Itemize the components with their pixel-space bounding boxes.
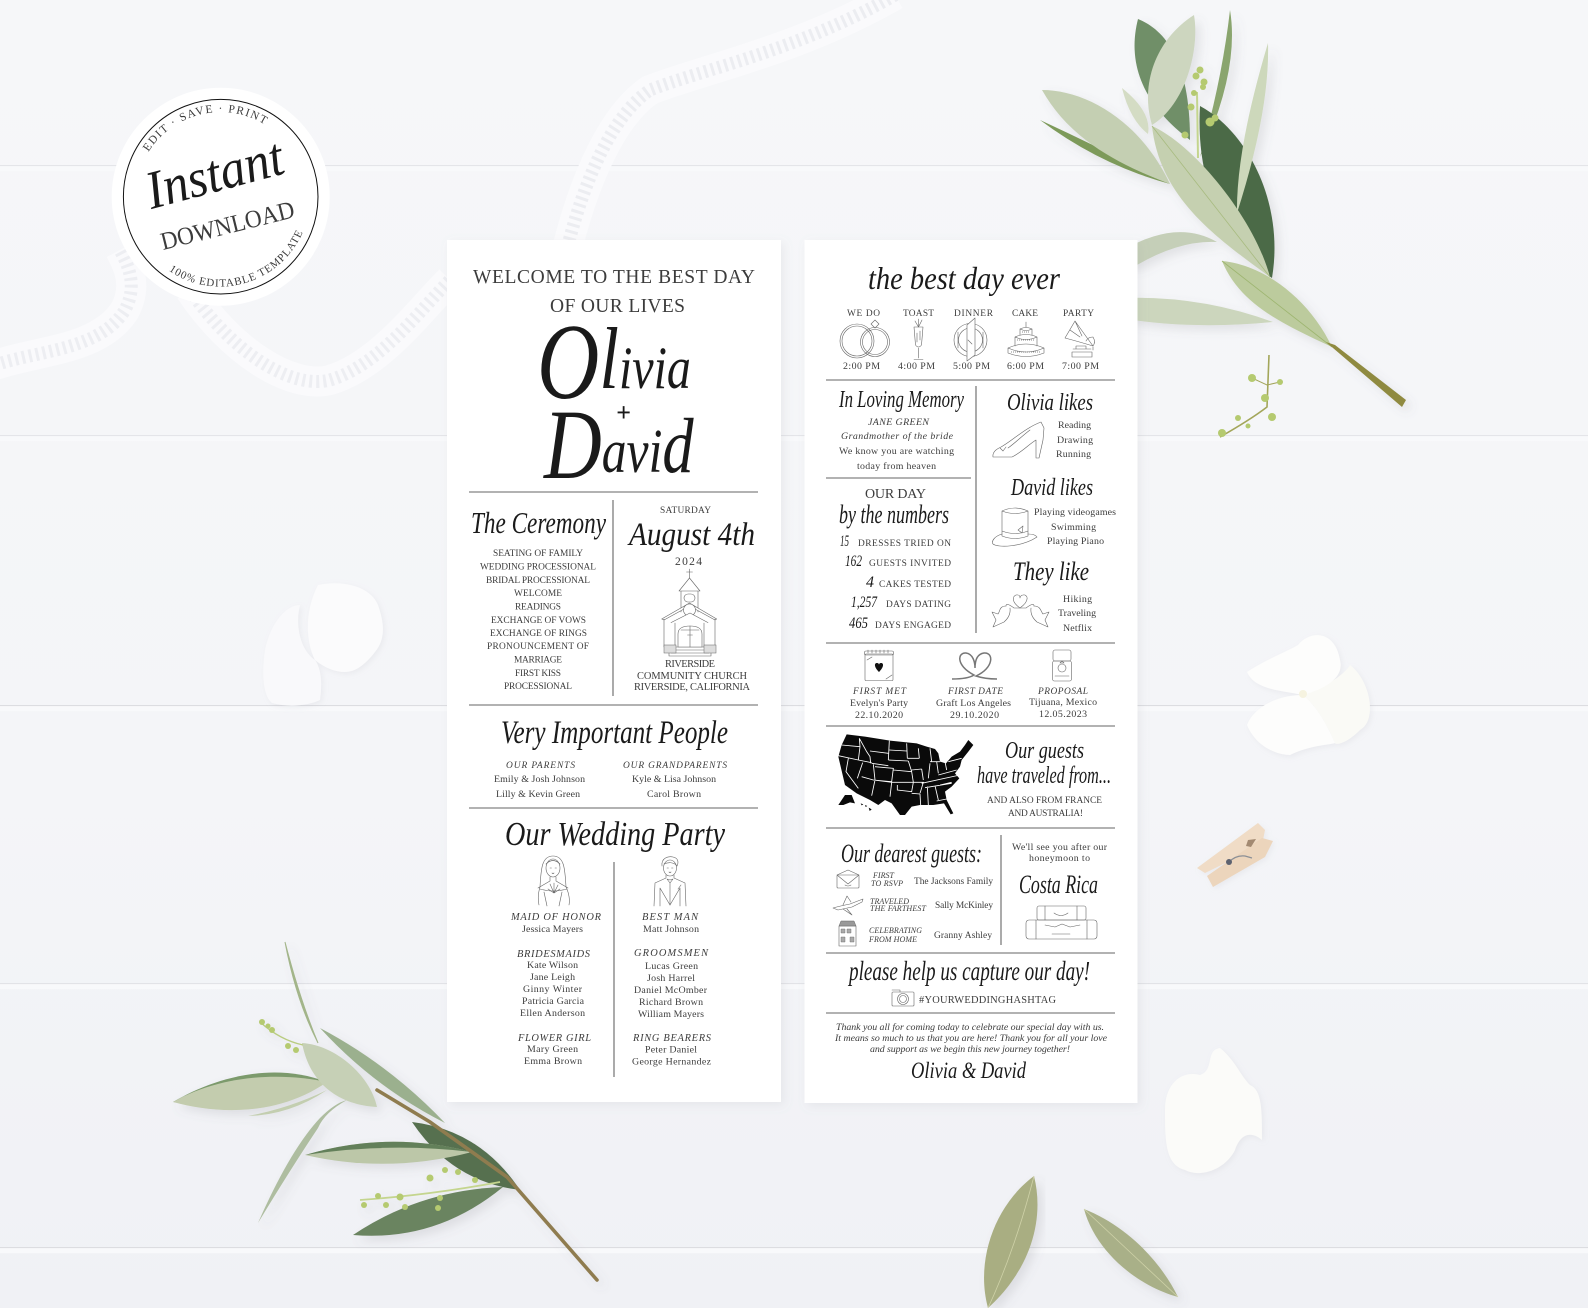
wedding party: groom side: RING BEARERS [632,1033,712,1044]
ceremony order: READINGS [515,602,561,612]
icon: suitcases [1026,906,1097,939]
couple names: l [599,311,619,408]
in loving memory: today from heaven [857,461,936,472]
couple names [537,303,694,500]
couple names: avi [602,418,662,486]
very important people: Very Important People [501,715,728,751]
honeymoon [1012,842,1108,899]
panel: left program card [447,240,781,1102]
our day by the numbers: by the numbers [839,500,949,529]
milestones: 12.05.2023 [1039,709,1087,720]
icon: church [662,569,717,656]
in loving memory: In Loving Memory [838,387,964,413]
guests travel text: AND AUSTRALIA! [1008,809,1083,819]
our day by the numbers: DRESSES TRIED ON [858,539,951,549]
icon: camera [892,990,914,1006]
ceremony order: PRONOUNCEMENT OF [487,642,589,652]
couple names: d [662,404,694,490]
milestones [850,687,1097,721]
wedding party: groom side: Peter Daniel [645,1044,697,1056]
title: welcome [473,267,755,317]
lace ribbon: upper right [568,0,895,245]
icon: groom [654,857,686,906]
wedding party heading: Our Wedding Party [505,816,726,853]
timeline labels: DINNER [954,309,994,319]
panel: right program card [804,240,1138,1103]
ceremony order: BRIDAL PROCESSIONAL [486,576,590,586]
olivia likes: Reading [1058,420,1091,431]
icon: wedding rings [840,320,890,358]
guests travel text [977,738,1111,819]
our day by the numbers: 4 [866,574,874,591]
icon: champagne flute [914,319,923,360]
ceremony order: MARRIAGE [514,656,562,666]
thank you note [834,1022,1108,1055]
wedding party: bride side: Patricia Garcia [522,996,585,1007]
title: welcome: OF OUR LIVES [550,296,685,317]
award: traveled the farthest [870,897,993,913]
very important people: Carol Brown [647,789,701,800]
olivia likes: Olivia likes [1007,390,1093,416]
badge word: download: DOWNLOAD [158,196,297,256]
thank you note: It means so much to us that you are here! Thank you for all your love [834,1033,1108,1044]
award: traveled the farthest: Sally McKinley [935,901,993,911]
wedding party: bride side: BRIDESMAIDS [517,949,591,960]
badge script: instant: Instant [138,126,292,221]
olivia likes: Running [1056,449,1091,460]
our day by the numbers: 162 [845,553,862,570]
they like: They like [1013,557,1089,586]
icon: calendar heart [864,650,894,680]
milestones: 29.10.2020 [950,710,999,721]
couple names: + [616,398,631,427]
they like: Traveling [1058,608,1096,619]
icon: envelope [837,870,859,888]
very important people: OUR GRANDPARENTS [623,761,727,771]
timeline labels: 6:00 PM [1007,361,1044,372]
couple names: O [537,303,599,422]
wedding party: bride side: Ellen Anderson [520,1008,585,1019]
wedding party: groom side: Richard Brown [639,997,703,1008]
timeline labels: WE DO [847,309,880,319]
in loving memory: Grandmother of the bride [841,431,954,442]
icon: airplane [833,896,863,915]
wedding party: bride side: MAID OF HONOR [510,912,602,923]
very important people: Kyle & Lisa Johnson [632,774,716,785]
lace ribbon: lower left [0,250,450,382]
icon: high heel shoe [993,422,1044,458]
timeline labels: 4:00 PM [898,361,935,372]
in loving memory: We know you are watching [839,446,954,457]
flower: bottom right [1165,1048,1262,1173]
flower petal: left [263,583,383,706]
olivia likes: Drawing [1057,435,1093,446]
award: traveled the farthest: THE FARTHEST [870,904,927,913]
very important people: Lilly & Kevin Green [496,789,580,800]
icon: rope heart [952,653,997,679]
award: celebrating from home: FROM HOME [868,935,917,944]
timeline labels: 7:00 PM [1062,361,1099,372]
timeline labels: PARTY [1063,309,1094,319]
milestones: Evelyn's Party [850,698,908,709]
wedding party: bride side: Emma Brown [524,1056,582,1067]
milestones: Tijuana, Mexico [1029,697,1097,708]
olive leaf: bottom right [1084,1209,1178,1297]
our day by the numbers: DAYS ENGAGED [875,621,951,631]
wedding party: groom side: George Hernandez [632,1056,712,1068]
our day by the numbers: GUESTS INVITED [869,559,951,569]
our day by the numbers: 15 [840,533,849,550]
olive branch: bottom left [173,942,597,1280]
our day by the numbers: 1,257 [851,594,878,611]
date: SATURDAY [660,506,711,516]
hashtag: #YOURWEDDINGHASHTAG [919,995,1056,1006]
thank you note: and support as we begin this new journey together! [870,1044,1070,1055]
venue [634,659,750,693]
olivia likes [1007,390,1093,460]
icon: gramophone [1065,321,1094,357]
award: celebrating from home: CELEBRATING [869,926,922,935]
wedding party: groom side [632,912,712,1068]
timeline labels: 2:00 PM [843,361,880,372]
icon: bride [538,856,569,906]
couple names: ivia [619,335,691,401]
milestones: FIRST MET [852,687,907,697]
david likes: Swimming [1051,522,1096,533]
wedding party: bride side [510,912,602,1067]
timeline labels: 5:00 PM [953,361,990,372]
wedding party: bride side: Jane Leigh [530,972,575,983]
very important people [494,715,728,800]
david likes [1010,475,1116,547]
timeline labels: CAKE [1012,309,1038,319]
honeymoon: Costa Rica [1019,870,1098,899]
icon: dinner plate [954,318,987,361]
date: August 4th [627,517,755,553]
clothespin [1197,823,1273,887]
they like: Hiking [1063,594,1092,605]
milestones: 22.10.2020 [855,710,903,721]
ceremony order: WEDDING PROCESSIONAL [480,562,596,572]
milestones: PROPOSAL [1037,687,1088,697]
timeline labels [843,309,1099,372]
david likes: Playing Piano [1047,536,1104,547]
very important people: OUR PARENTS [506,761,575,771]
ceremony order: PROCESSIONAL [504,682,572,692]
map: united states [838,734,973,815]
wedding party: groom side: Daniel McOmber [634,985,708,996]
guests travel text: AND ALSO FROM FRANCE [987,796,1102,806]
award: first to rsvp [871,871,993,888]
dearest guests heading: Our dearest guests: [841,839,982,868]
olive leaf: bottom centre [984,1176,1037,1308]
wedding party: bride side: FLOWER GIRL [517,1033,591,1044]
icon: house building [839,921,856,946]
date: 2024 [675,556,702,568]
in loving memory: JANE GREEN [868,417,930,428]
our day by the numbers: OUR DAY [865,487,926,502]
date [627,506,755,568]
couple names: D [542,389,602,500]
award: first to rsvp: The Jacksons Family [914,877,993,887]
milestones: FIRST DATE [947,687,1003,697]
title: welcome: WELCOME TO THE BEST DAY [473,267,755,288]
icon: wedding cake [1008,322,1044,356]
badge: instant download [112,88,330,306]
icon: ring box [1052,650,1072,681]
wedding party: bride side: Jessica Mayers [522,924,583,935]
ceremony order: WELCOME [514,589,562,599]
ceremony order: EXCHANGE OF RINGS [490,629,587,639]
milestones: Graft Los Angeles [936,698,1011,709]
ceremony order: SEATING OF FAMILY [493,549,583,559]
ceremony order [471,505,606,692]
in loving memory [838,387,964,472]
icon: doves with heart [992,595,1049,627]
flower: right [1247,635,1370,755]
wedding party: groom side: GROOMSMEN [634,948,709,959]
they like: Netflix [1063,623,1092,634]
very important people: Emily & Josh Johnson [494,774,585,785]
our day by the numbers [839,487,951,632]
icon: top hat [992,508,1037,546]
signature: Olivia & David [911,1058,1026,1083]
venue: COMMUNITY CHURCH [637,671,747,682]
wedding party: groom side: Matt Johnson [643,924,699,935]
badge arc text: edit save print: EDIT · SAVE · PRINT [142,104,268,152]
guests travel text: have traveled from... [977,763,1111,789]
award: first to rsvp: TO RSVP [871,879,903,888]
ceremony order: FIRST KISS [515,669,561,679]
guests travel text: Our guests [1005,738,1084,764]
olive sprig: small right [1218,355,1283,437]
hashtag heading: please help us capture our day! [848,956,1090,986]
award: traveled the farthest: TRAVELED [870,897,909,906]
wedding party: bride side: Kate Wilson [527,960,578,971]
our day by the numbers: 465 [849,615,868,632]
they like [1013,557,1096,634]
our day by the numbers: DAYS DATING [886,600,951,610]
award: first to rsvp: FIRST [872,871,895,880]
olive branch: top right [1040,10,1406,407]
wedding party: groom side: BEST MAN [642,912,699,923]
wedding party: bride side: Mary Green [527,1044,578,1055]
badge arc text: editable template: 100% EDITABLE TEMPLATE [170,230,302,287]
wedding party: groom side: Lucas Green [645,961,698,972]
wedding party: groom side: Josh Harrel [647,973,695,984]
award: celebrating from home: Granny Ashley [934,931,992,941]
heading: the best day ever: the best day ever [868,260,1060,296]
honeymoon: We'll see you after our [1012,842,1108,853]
timeline labels: TOAST [903,309,934,319]
david likes: David likes [1010,475,1093,501]
award: celebrating from home [868,926,992,944]
david likes: Playing videogames [1034,507,1116,518]
wedding party: groom side: William Mayers [638,1009,704,1020]
venue: RIVERSIDE, CALIFORNIA [634,682,750,693]
thank you note: Thank you all for coming today to celebrate our special day with us. [836,1022,1104,1033]
venue: RIVERSIDE [665,659,715,670]
honeymoon: honeymoon to [1029,853,1090,864]
ceremony order: EXCHANGE OF VOWS [491,616,586,626]
our day by the numbers: CAKES TESTED [879,580,951,590]
ceremony order: The Ceremony [471,505,606,540]
wedding party: bride side: Ginny Winter [523,984,583,995]
